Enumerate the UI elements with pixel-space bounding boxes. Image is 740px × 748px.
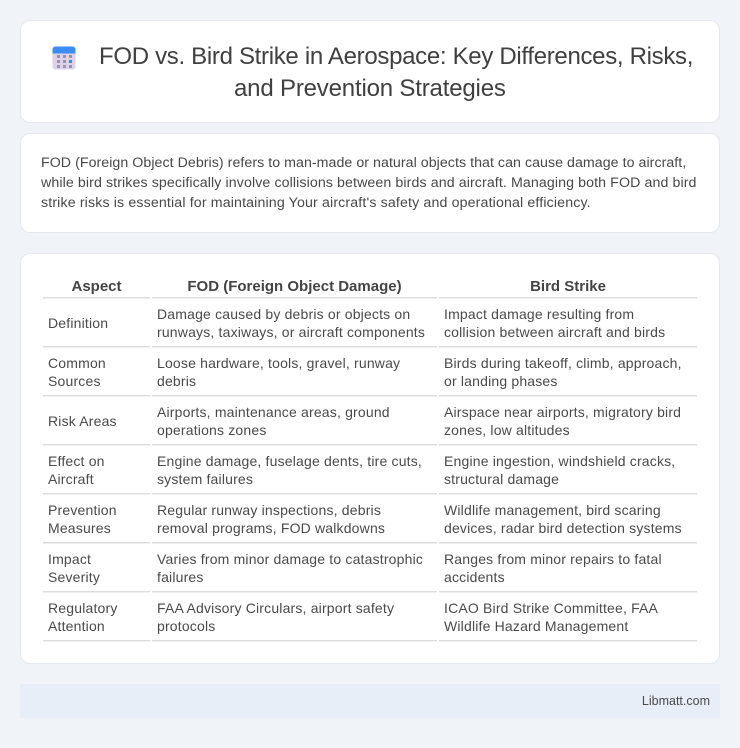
definition FOD: Damage caused by debris or objects on [157, 306, 410, 322]
effect bird strike [444, 453, 675, 487]
definition FOD: runways, taxiways, or aircraft components [157, 324, 425, 340]
row: definition: Definition [48, 315, 108, 331]
footer text: Libmatt.com [642, 694, 710, 708]
row: effect on aircraft [48, 453, 105, 487]
regulatory bird strike: Wildlife Hazard Management [444, 618, 628, 634]
regulatory FOD: FAA Advisory Circulars, airport safety [157, 600, 394, 616]
footer bar [20, 684, 720, 718]
severity FOD: Varies from minor damage to catastrophic [157, 551, 423, 567]
prevention FOD: Regular runway inspections, debris [157, 502, 381, 518]
definition bird strike: Impact damage resulting from [444, 306, 634, 322]
intro text: strike risks is essential for maintaining Your aircraft's safety and operational efficiency. [41, 195, 591, 211]
sources FOD: Loose hardware, tools, gravel, runway [157, 355, 400, 371]
table header: bird strike: Bird Strike [530, 278, 606, 295]
row: common sources [48, 355, 106, 389]
table header: FOD: FOD (Foreign Object Damage) [187, 278, 402, 295]
panel: introduction [20, 133, 720, 233]
severity bird strike: accidents [444, 569, 505, 585]
regulatory FOD: protocols [157, 618, 215, 634]
risk bird strike [444, 404, 681, 438]
row: impact severity: Impact [48, 551, 91, 567]
row: prevention measures: Measures [48, 520, 111, 536]
effect FOD: Engine damage, fuselage dents, tire cuts, [157, 453, 422, 469]
icon: calendar [52, 46, 76, 70]
sources bird strike [444, 355, 682, 389]
risk FOD: Airports, maintenance areas, ground [157, 404, 390, 420]
row: prevention measures: Prevention [48, 502, 117, 518]
severity bird strike [444, 551, 662, 585]
regulatory bird strike [444, 600, 658, 634]
row: effect on aircraft: Effect on [48, 453, 105, 469]
sources bird strike: or landing phases [444, 373, 558, 389]
severity bird strike: Ranges from minor repairs to fatal [444, 551, 662, 567]
prevention FOD [157, 502, 385, 536]
definition bird strike [444, 306, 665, 340]
panel: comparison table [20, 253, 720, 664]
row: regulatory attention: Regulatory [48, 600, 118, 616]
row: prevention measures [48, 502, 117, 536]
intro text [41, 155, 697, 211]
regulatory bird strike: ICAO Bird Strike Committee, FAA [444, 600, 658, 616]
sources FOD [157, 355, 400, 389]
row: common sources: Common [48, 355, 106, 371]
regulatory FOD [157, 600, 394, 634]
table header: aspect: Aspect [71, 278, 122, 295]
definition FOD [157, 306, 425, 340]
effect FOD [157, 453, 422, 487]
sources bird strike: Birds during takeoff, climb, approach, [444, 355, 682, 371]
severity FOD [157, 551, 423, 585]
effect bird strike: Engine ingestion, windshield cracks, [444, 453, 675, 469]
title: FOD vs. Bird Strike in Aerospace: Key Differences, Risks, [99, 43, 693, 70]
severity FOD: failures [157, 569, 204, 585]
risk FOD [157, 404, 390, 438]
row: effect on aircraft: Aircraft [48, 471, 94, 487]
prevention bird strike: Wildlife management, bird scaring [444, 502, 661, 518]
panel: header [20, 20, 720, 123]
row: regulatory attention: Attention [48, 618, 105, 634]
effect FOD: system failures [157, 471, 253, 487]
title: and Prevention Strategies [234, 75, 506, 102]
definition bird strike: collision between aircraft and birds [444, 324, 665, 340]
risk bird strike: Airspace near airports, migratory bird [444, 404, 681, 420]
row: impact severity: Severity [48, 569, 100, 585]
title [99, 43, 693, 102]
row: regulatory attention [48, 600, 118, 634]
sources FOD: debris [157, 373, 196, 389]
prevention bird strike [444, 502, 682, 536]
risk bird strike: zones, low altitudes [444, 422, 570, 438]
row: risk areas: Risk Areas [48, 413, 117, 429]
intro text: while bird strikes specifically involve collisions between birds and aircraft. Managing both FOD and bird [41, 175, 697, 191]
effect bird strike: structural damage [444, 471, 559, 487]
row: impact severity [48, 551, 100, 585]
intro text: FOD (Foreign Object Debris) refers to man-made or natural objects that can cause damage to aircraft, [41, 155, 686, 171]
risk FOD: operations zones [157, 422, 267, 438]
row: common sources: Sources [48, 373, 101, 389]
prevention bird strike: devices, radar bird detection systems [444, 520, 682, 536]
prevention FOD: removal programs, FOD walkdowns [157, 520, 385, 536]
